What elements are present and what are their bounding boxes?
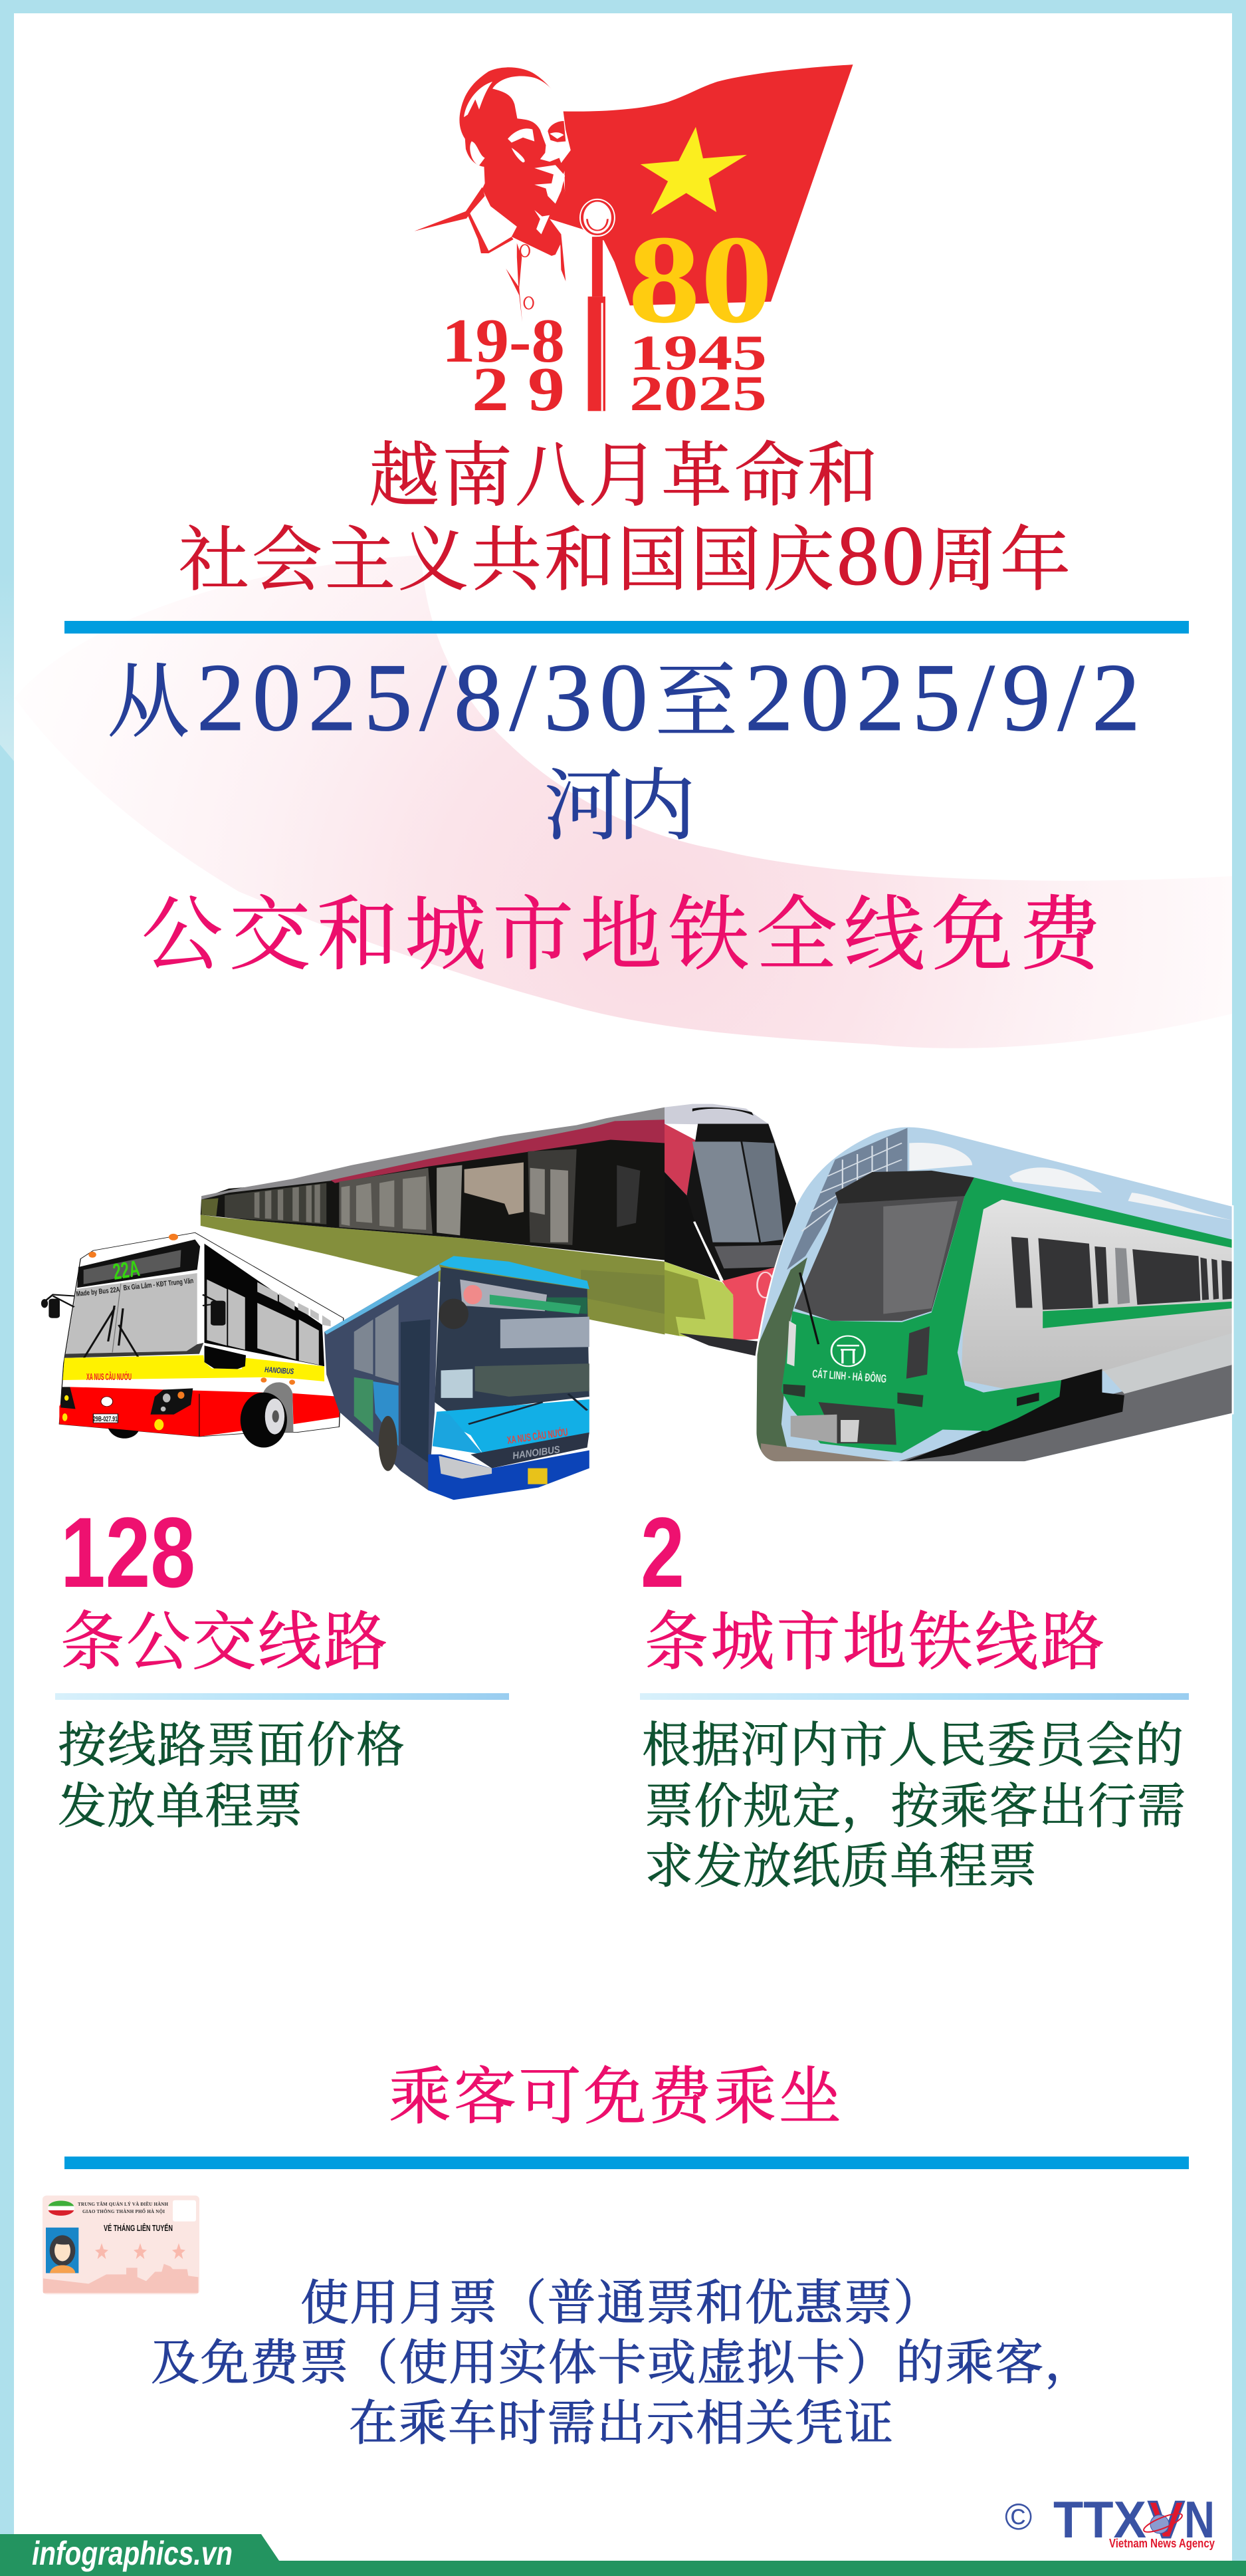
dates: 2025: [629, 366, 767, 421]
passenger note: [151, 2276, 1093, 2450]
bus labels: 29B-027.91: [93, 1415, 118, 1423]
illustration: green metro train: [754, 1123, 1235, 1465]
label: 条城市地铁线路: [645, 1607, 1104, 1678]
dates: 19-8: [442, 306, 565, 376]
windscreen: [794, 1195, 965, 1321]
body: [962, 1199, 1232, 1389]
stat: metro lines: [640, 1496, 1189, 1893]
wheels: [108, 1428, 139, 1439]
ground: [894, 1363, 1232, 1463]
logo: 80th anniversary emblem: [414, 64, 853, 424]
TTXVN logo: Vietnam News Agency: [1109, 2537, 1215, 2550]
bus labels: 22A: [111, 1256, 142, 1285]
microphone: [579, 199, 615, 411]
title: 越南八月革命和: [369, 437, 878, 515]
background swoosh: [15, 555, 1232, 1048]
date range: 从2025/8/30至2025/9/2: [107, 644, 1140, 751]
train label: CÁT LINH - HÀ ĐÔNG: [812, 1367, 887, 1385]
TTXVN logo: N: [1184, 2490, 1215, 2549]
train front: [665, 1104, 776, 1143]
number 80: 80: [628, 210, 773, 350]
TTXVN logo: [1053, 2490, 1215, 2550]
dates: 2: [472, 355, 509, 424]
illustration: blue bus: [324, 1256, 589, 1500]
underline: [55, 1693, 509, 1700]
blue bus labels: HANOIBUS: [512, 1444, 561, 1462]
card text: TRUNG TÂM QUẢN LÝ VÀ ĐIỀU HÀNH: [78, 2202, 169, 2207]
number: 128: [60, 1496, 195, 1608]
red lower body: [59, 1387, 263, 1437]
card text: GIAO THÔNG THÀNH PHỐ HÀ NỘI: [82, 2209, 165, 2214]
dates: 1945: [629, 326, 767, 381]
free headline: 公交和城市地铁全线免费: [142, 891, 1103, 981]
card text: VÉ THÁNG LIÊN TUYẾN: [104, 2223, 173, 2233]
passenger note: 在乘车时需出示相关凭证: [349, 2397, 893, 2450]
icon: monthly ticket card: [43, 2196, 199, 2294]
dates: [442, 306, 767, 424]
roof and side: [59, 1232, 344, 1437]
divider: [64, 621, 1189, 634]
title: [179, 437, 1071, 603]
mirrors: [45, 1294, 74, 1307]
description: [58, 1718, 405, 1833]
lower front: [437, 1399, 589, 1455]
train side: [201, 1215, 665, 1335]
location: 河内: [544, 763, 696, 850]
description: 按线路票面价格: [58, 1718, 405, 1772]
plate and details: [93, 1414, 118, 1423]
card text: [78, 2202, 173, 2233]
windscreen: [66, 1273, 197, 1354]
description: [642, 1718, 1186, 1893]
site name: infographics.vn: [32, 2535, 233, 2572]
wipers: [80, 1306, 142, 1363]
bus labels: Made by Bus 22A: [76, 1286, 120, 1298]
divider: [64, 2157, 1189, 2169]
footer band: [0, 2534, 1246, 2576]
portrait: [414, 67, 571, 322]
description: 根据河内市人民委员会的: [642, 1718, 1184, 1772]
description: 发放单程票: [58, 1780, 302, 1833]
subheading: 乘客可免费乘坐: [389, 2063, 841, 2132]
star: [641, 127, 747, 215]
yellow band: [62, 1355, 324, 1381]
bus labels: HANOIBUS: [264, 1365, 294, 1376]
description: 票价规定，按乘客出行需: [645, 1780, 1186, 1833]
underline: [640, 1693, 1189, 1700]
dates: 9: [528, 355, 565, 424]
bus labels: Bx Gia Lâm - KĐT Trung Văn: [123, 1277, 194, 1292]
green livery: [781, 1177, 1232, 1453]
windscreen: [435, 1267, 589, 1413]
bus labels: [76, 1256, 294, 1423]
TTXVN logo: TTX: [1053, 2490, 1146, 2549]
copyright mark: ©: [1005, 2496, 1032, 2537]
illustration: yellow and red bus: [41, 1232, 344, 1448]
description: 求发放纸质单程票: [645, 1839, 1037, 1893]
side: [324, 1264, 439, 1490]
headlights: [150, 1388, 193, 1415]
number: 2: [641, 1496, 684, 1608]
blue bus labels: XA NUS CẦU NƯỚU: [506, 1425, 569, 1447]
TTXVN logo: V: [1148, 2490, 1184, 2549]
label: 条公交线路: [60, 1607, 387, 1678]
windows: [1011, 1236, 1232, 1310]
metro emblem: [831, 1336, 865, 1366]
blue bus labels: [506, 1425, 569, 1462]
front header: [77, 1240, 200, 1288]
lights and grilles: [783, 1384, 923, 1407]
title: 社会主义共和国国庆80周年: [179, 509, 1071, 603]
illustration: red metro train: [201, 1104, 796, 1357]
flag: [414, 64, 853, 411]
stat: bus routes: [55, 1496, 509, 1833]
underbody: [906, 1369, 1124, 1461]
coupler: [819, 1402, 896, 1445]
roof: [439, 1256, 589, 1289]
passenger note: 使用月票（普通票和优惠票）: [300, 2276, 942, 2330]
bus labels: XA NUS CẦU NƯỚU: [86, 1371, 132, 1383]
passenger note: 及免费票（使用实体卡或虚拟卡）的乘客，: [151, 2336, 1093, 2390]
